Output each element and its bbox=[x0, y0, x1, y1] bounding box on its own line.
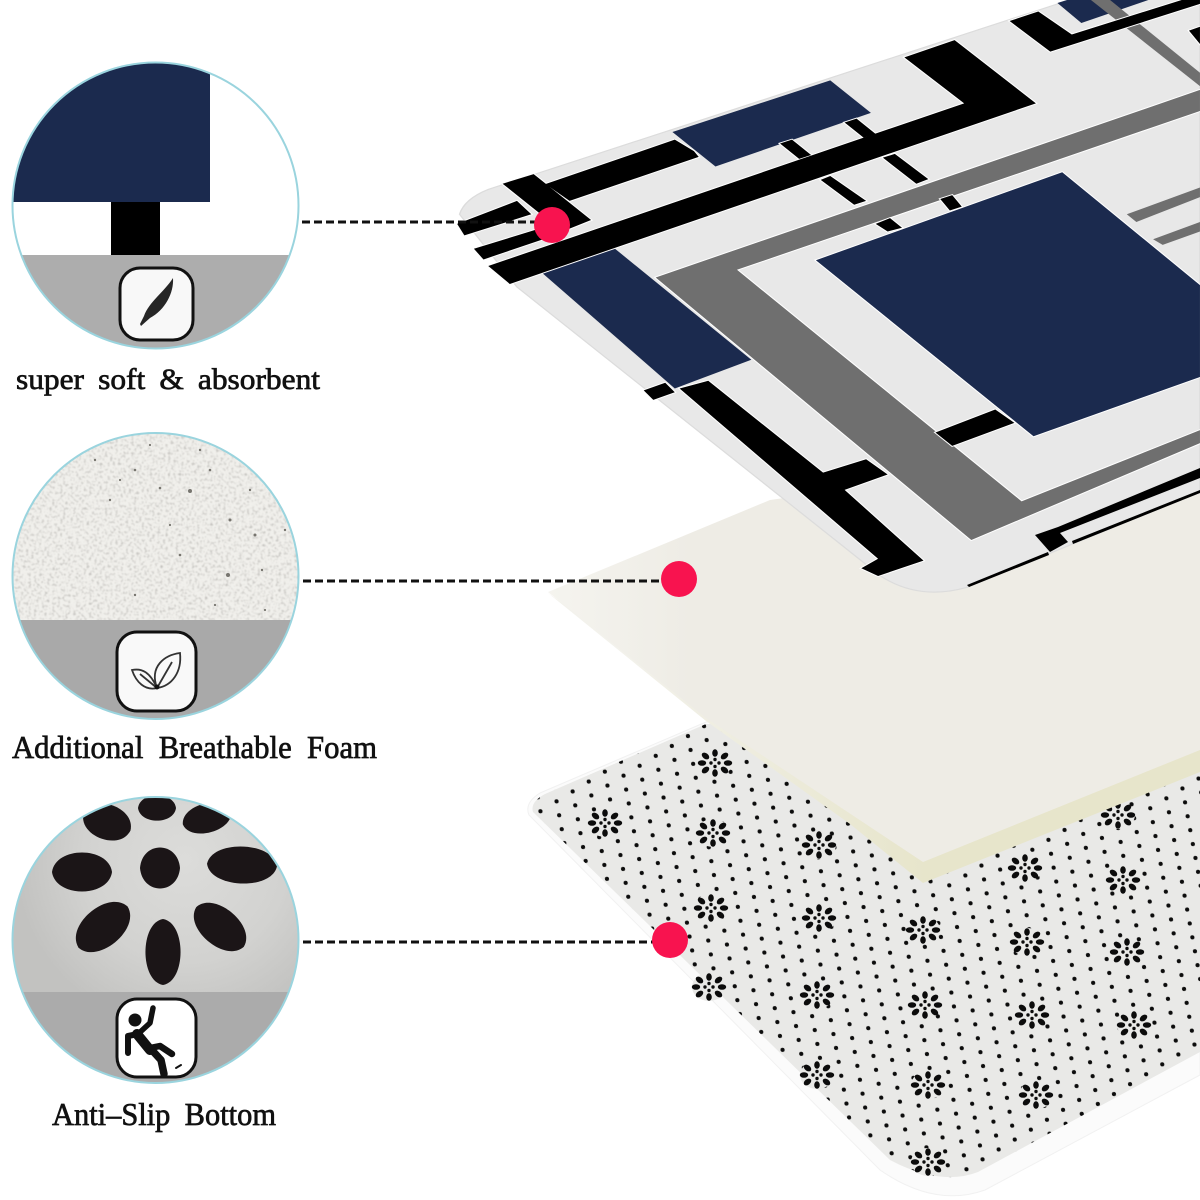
navy central square bbox=[816, 172, 1200, 436]
navy left rectangle bbox=[538, 249, 751, 388]
black strips bbox=[457, 0, 1200, 576]
mat base surface bbox=[460, 0, 1200, 592]
panel: anti-slip rubber backing layer bbox=[528, 722, 1200, 1196]
circle: foam texture detail bbox=[10, 430, 302, 725]
black strips halo bbox=[457, 0, 1200, 576]
panel: breathable foam layer bbox=[548, 440, 1200, 883]
icon: feather bbox=[120, 268, 193, 340]
gray frame band bbox=[656, 90, 1200, 540]
foam side edge bbox=[548, 593, 1200, 883]
gray thin lines bbox=[1091, 0, 1200, 245]
backing dot pattern bbox=[532, 724, 1200, 1177]
callout: connector to foam bbox=[303, 561, 697, 597]
foam top surface bbox=[548, 440, 1200, 862]
callout: connector to backing bbox=[303, 922, 688, 958]
icon: leaves bbox=[117, 632, 196, 711]
label: additional breathable foam: Additional Breathable Foam bbox=[12, 729, 377, 765]
circle: anti-slip grip detail bbox=[10, 795, 302, 1087]
mat lower-right black edge lines bbox=[967, 468, 1200, 587]
label: super soft and absorbent: super soft & absorbent bbox=[16, 363, 321, 396]
backing inner surface bbox=[532, 724, 1200, 1177]
navy top-right sliver bbox=[1057, 0, 1148, 23]
backing flower clusters bbox=[588, 749, 1151, 1176]
navy upper rectangle bbox=[672, 80, 871, 166]
circle: super soft fabric detail bbox=[10, 60, 302, 352]
callout: connector to top mat bbox=[302, 207, 570, 243]
label: anti-slip bottom: Anti–Slip Bottom bbox=[52, 1096, 276, 1132]
backing white rim bbox=[528, 722, 1200, 1196]
icon: slipping person bbox=[117, 999, 196, 1077]
panel: printed top mat layer bbox=[457, 0, 1200, 592]
